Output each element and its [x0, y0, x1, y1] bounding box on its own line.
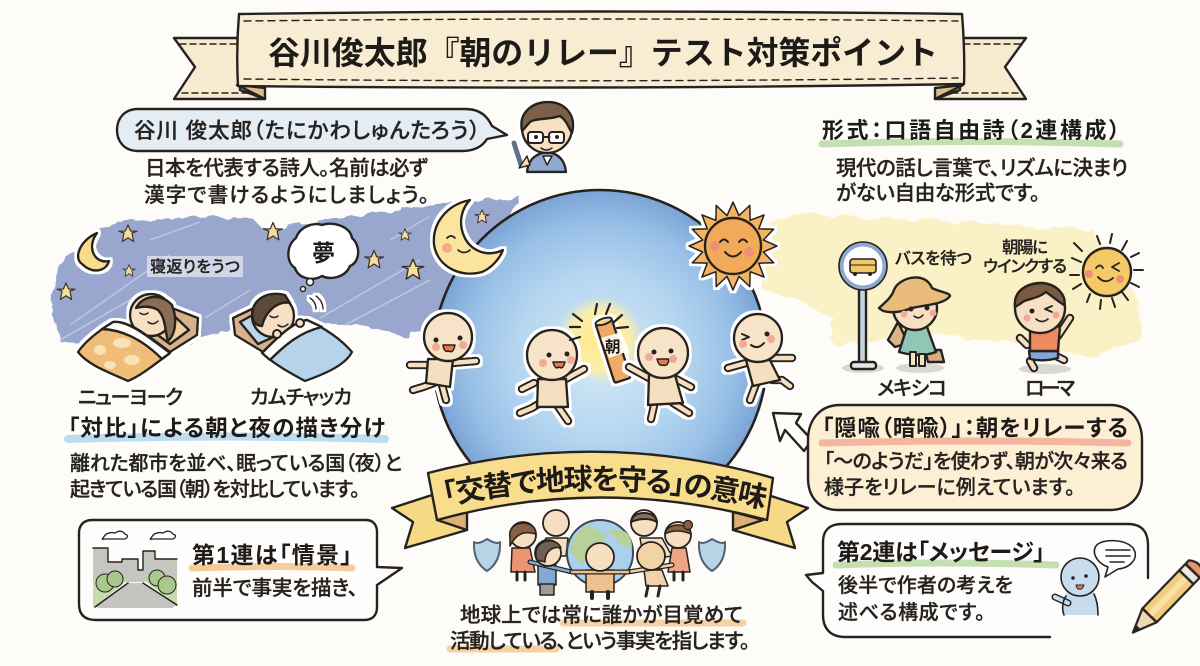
ribbon: alternating shifts — [390, 450, 810, 550]
city labels: day — [877, 378, 1075, 400]
second stanza heading: 第2連は「メッセージ」 — [837, 539, 1045, 565]
icon: poet with glasses — [514, 102, 573, 172]
poet description: 漢字で書けるようにしましょう。 — [144, 184, 429, 207]
city labels: day: メキシコ — [877, 378, 947, 400]
earth — [567, 520, 633, 586]
first stanza heading: 第1連は「情景」 — [192, 542, 352, 568]
metaphor body: 様子をリレーに例えています。 — [824, 476, 1075, 499]
city labels: night: カムチャッカ — [250, 387, 352, 409]
form description — [836, 157, 1128, 205]
night sky patch — [50, 196, 520, 348]
ribbon body — [428, 452, 773, 520]
icon: blue figure — [1055, 558, 1099, 615]
central globe — [433, 190, 767, 524]
icon: sun with face — [689, 202, 777, 290]
small winking sun — [1070, 234, 1143, 309]
poet description: 日本を代表する詩人。名前は必ず — [145, 157, 429, 180]
wink caption — [983, 238, 1067, 276]
arrow to metaphor callout — [773, 413, 812, 451]
city labels: day: ローマ — [1025, 378, 1075, 400]
baton with morning kanji — [595, 316, 631, 383]
right child with bun — [665, 520, 692, 580]
ribbon explanation: 活動している、という事実を指します。 — [450, 630, 750, 653]
ribbon explanation — [450, 604, 750, 653]
spark lines — [570, 304, 628, 340]
icon: small crescent moon — [78, 233, 109, 270]
metaphor body: 「～のようだ」を使わず、朝が次々来る — [824, 450, 1128, 473]
wink caption: ウインクする — [983, 257, 1067, 276]
baton runner: far left — [410, 313, 476, 400]
title banner — [174, 12, 1026, 99]
right front child — [628, 542, 672, 596]
ribbon left tail — [392, 495, 467, 548]
earth and children — [510, 510, 692, 598]
city labels: night — [78, 386, 352, 409]
icon: right shield — [699, 539, 725, 571]
baton runner: far right — [728, 314, 792, 400]
contrast heading: 「対比」による朝と夜の描き分け — [68, 416, 385, 441]
card: second stanza — [806, 524, 1148, 637]
ribbon explanation: 地球上では常に誰かが目覚めて — [460, 604, 743, 627]
name pill — [117, 109, 507, 151]
city labels: night: ニューヨーク — [78, 386, 183, 409]
form heading: 形式：口語自由詩（2連構成） — [822, 118, 1120, 143]
banner right tail — [935, 38, 1026, 99]
second stanza body: 後半で作者の考えを — [838, 574, 1013, 597]
callout: metaphor — [808, 405, 1142, 510]
wink caption: 朝陽に — [1002, 238, 1048, 257]
metaphor heading: 「隠喩（暗喩）」：朝をリレーする — [822, 416, 1128, 441]
baton runner: receiving — [520, 330, 584, 421]
name text: 谷川 俊太郎（たにかわしゅんたろう） — [134, 119, 480, 143]
icon: pencil — [1126, 557, 1200, 640]
bus stop caption: バスを待つ — [894, 249, 972, 268]
winking boy — [1015, 283, 1071, 374]
ribbon right tail — [733, 495, 808, 548]
turning over label: 寝返りをうつ — [150, 258, 240, 276]
metaphor body — [824, 450, 1128, 499]
form description: がない自由な形式です。 — [836, 182, 1040, 205]
icon: city street — [93, 531, 177, 608]
sleeping child: Kamchatka — [233, 294, 352, 381]
day sky patch — [762, 212, 1140, 357]
second stanza body — [838, 574, 1013, 624]
card: first stanza — [79, 520, 402, 620]
banner left tail — [174, 38, 265, 99]
icon: left shield — [474, 539, 500, 571]
night stars — [57, 210, 489, 300]
sleeping child: New York — [78, 294, 198, 381]
dream thought bubble: 夢 — [312, 240, 335, 266]
back children — [536, 510, 672, 560]
title text: 谷川俊太郎『朝のリレー』テスト対策ポイント — [268, 35, 938, 71]
girl in straw hat — [879, 277, 950, 373]
chalk texture — [60, 216, 430, 340]
ribbon text: 「交替で地球を守る」の意味 — [444, 464, 767, 510]
baton runner: passing — [629, 328, 691, 419]
icon: speech bubble — [1094, 541, 1135, 577]
baton with morning kanji: 朝 — [605, 338, 621, 356]
first stanza body: 前半で事実を描き、 — [192, 577, 358, 600]
globe base cover — [437, 498, 767, 535]
banner body — [237, 12, 964, 88]
contrast description: 離れた都市を並べ、眠っている国（夜）と — [70, 452, 402, 475]
contrast description — [70, 452, 402, 501]
second stanza body: 述べる構成です。 — [838, 601, 985, 624]
dream thought bubble — [288, 224, 358, 292]
left child with brown hair — [510, 522, 536, 580]
icon: moon with face — [434, 200, 503, 274]
glow behind baton — [556, 296, 644, 384]
contrast description: 起きている国（朝）を対比しています。 — [70, 478, 360, 501]
poet description — [144, 157, 429, 207]
form description: 現代の話し言葉で、リズムに決まり — [836, 157, 1128, 180]
bus stop — [839, 242, 887, 373]
left child with blue shirt — [530, 540, 572, 595]
front child — [572, 543, 628, 598]
